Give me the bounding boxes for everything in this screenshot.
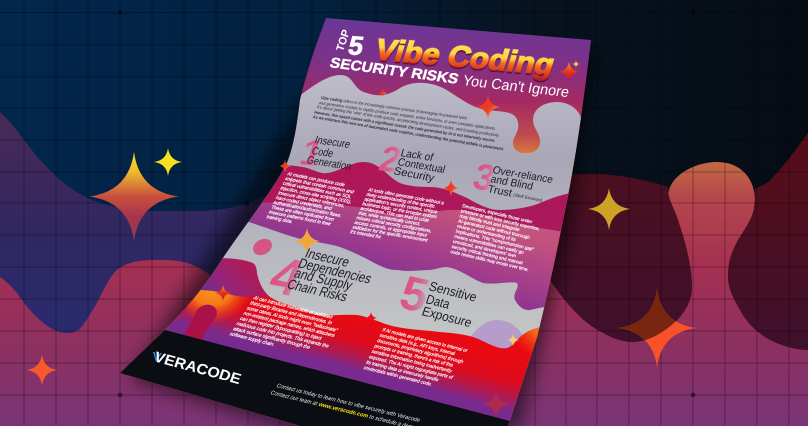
title [328, 28, 580, 101]
poster crimson blob [184, 304, 217, 340]
intro text [312, 95, 505, 151]
footer contact text [269, 383, 421, 426]
body text: lack of contextual security: deep understanding of the specific [365, 192, 437, 210]
background: right dome and glow [520, 162, 808, 426]
icon: gold sparkle right [588, 188, 630, 230]
icon: sparkle near footer left [215, 285, 231, 301]
body text: insecure dependencies: non-existent package names, which attackers [242, 311, 336, 339]
poster orange glow right [518, 327, 540, 353]
icon: orange sparkle right [618, 289, 696, 367]
intro text: It's about getting the 'vibe' of the code quickly, accelerating development cycles, and boosting productivity. [316, 104, 501, 138]
poster [120, 18, 591, 426]
body text: sensitive data exposure: credentials within generated code. [362, 365, 433, 388]
body text: insecure code generation: insecure patterns found in their [267, 209, 332, 228]
numeral 2: 2 [375, 138, 406, 180]
icon: red title sparkle [558, 62, 580, 82]
title numeral 5: 5 [346, 30, 366, 61]
body text: insecure code generation: hard-coded credentials, and [274, 195, 333, 212]
icon: header sparkle small [378, 88, 388, 98]
section 5 heading [394, 266, 479, 330]
body text: insecure dependencies: software supply chain. [228, 331, 276, 348]
body text: insecure code generation: authentication/authorization flaws. [272, 200, 343, 219]
body text: over-reliance and blind trust: Developers, especially those under [462, 203, 533, 224]
body text: over-reliance and blind trust: code review skills may erode over time. [450, 249, 529, 272]
body text: over-reliance and blind trust [450, 203, 542, 272]
poster red wave [100, 290, 545, 426]
section 4 heading: Chain Risks [285, 277, 350, 304]
intro text: As we embrace this new era of automated code creation, understanding the potential pitfalls is paramount. [312, 114, 505, 151]
section 1 heading: Code [310, 145, 335, 160]
body text: insecure dependencies: third-party libraries and dependencies. In [248, 301, 333, 326]
section 3 heading: (Skill Erosion) [513, 192, 544, 203]
background: left crimson wave [0, 260, 808, 426]
body text: sensitive data exposure: sensitive data (e.g., API keys, internal [378, 333, 456, 357]
section 3 heading: and Blind [489, 173, 534, 193]
icon: yellow title sparkle [572, 60, 580, 68]
background: right dark lobe left [550, 174, 692, 342]
section 2 heading: Security [392, 165, 436, 185]
title: Security Risks: SECURITY RISKS [328, 55, 460, 88]
section 2 heading [375, 138, 447, 185]
title: You Can't Ignore: You Can't Ignore [461, 73, 571, 101]
icon: small yellow sparkle [154, 148, 182, 176]
body text: sensitive data exposure: sensitive information being inadvertently [370, 349, 453, 375]
poster pink to purple band [220, 202, 565, 320]
body text: sensitive data exposure: prompts or training, there's a risk of this [373, 343, 455, 369]
poster black footer band [100, 330, 520, 426]
title: Vibe Coding: Vibe Coding [371, 34, 559, 81]
body text: insecure dependencies [228, 295, 347, 360]
icon: band sparkle right [443, 180, 459, 196]
body text: over-reliance and blind trust: review or understanding of its [456, 224, 517, 242]
body text: insecure dependencies: malicious code into projects. This expands the [235, 321, 330, 349]
body text: sensitive data exposure: If AI models are given access to internal or [381, 327, 469, 354]
body text: insecure code generation: These are often replicated from [270, 205, 335, 223]
poster crimson middle band [240, 162, 575, 330]
body text: lack of contextual security [349, 187, 445, 249]
body text: insecure dependencies: some cases, AI tools might even "hallucinate" [245, 306, 339, 334]
heading text: Over-reliance and Blind Trust: Over-reliance [491, 164, 554, 186]
body text: over-reliance and blind trust: unnoticed, and developers' own [452, 239, 517, 259]
body text: insecure code generation: insecure direct object references, [277, 190, 346, 209]
background: right dark lobe right [728, 133, 808, 350]
logo wordmark: VERACODE [152, 350, 243, 388]
icon: cream sparkle right [507, 334, 519, 346]
section 1 heading [295, 131, 353, 174]
body text: lack of contextual security: business logic, or the broader system [361, 201, 438, 220]
section 3 heading: Trust [486, 183, 513, 199]
poster shadow [130, 40, 596, 426]
body text: sensitive data exposure: its training data or insecurely handle [365, 360, 440, 383]
numeral 4: 4 [261, 247, 311, 308]
section 5 heading: Exposure [420, 304, 474, 330]
body text: over-reliance and blind trust: pressure or with less security expertise, [460, 208, 540, 232]
body text: sensitive data exposure [362, 327, 470, 392]
title word: TOP: TOP [334, 28, 353, 53]
body text: over-reliance and blind trust: means vulnerabilities can easily go [454, 234, 525, 255]
body text: insecure dependencies: attack surface significantly through the [231, 326, 312, 351]
body text: over-reliance and blind trust: may blindly trust and integrate [459, 213, 521, 232]
body text: over-reliance and blind trust: implications. This "comprehension gap" [455, 229, 535, 252]
section 4 heading: and Supply [292, 266, 355, 293]
icon: shaded part of orange sparkle [619, 290, 676, 340]
body text: insecure code generation: training data. [265, 214, 294, 225]
body text: insecure code generation [265, 171, 360, 234]
body text: insecure code generation: critical vulnerabilities such as SQL [281, 181, 353, 200]
intro text: However, this speed comes with a significant caveat: the code generated by AI is not inherently secure. [314, 110, 496, 143]
icon: gold sparkle mid poster [294, 228, 320, 254]
numeral 3: 3 [469, 156, 500, 199]
heading text: Sensitive Data Exposure: Sensitive [427, 279, 479, 305]
logo: Veracode [152, 350, 243, 388]
body text: lack of contextual security: that, while syntactically correct, [357, 211, 421, 227]
icon: crimson sparkle lower right [482, 390, 510, 418]
poster lower left crimson shape [186, 258, 270, 308]
body text: lack of contextual security: validation for the specific environment [351, 225, 429, 244]
poster gray panel with drips [136, 75, 581, 426]
body text: lack of contextual security: architecture. This can lead to code [359, 206, 430, 224]
icon: large gradient sparkle [90, 152, 178, 241]
body text: insecure code generation: snippets that contain common and [284, 176, 355, 195]
icon: red sparkle mid [365, 312, 377, 324]
numeral 5: 5 [394, 266, 435, 323]
contact line 1: Contact us today to learn how to vibe securely with Veracode [275, 383, 421, 424]
poster lower gray panel [212, 222, 544, 352]
section 4 heading: Dependencies [296, 256, 374, 286]
body text: sensitive data exposure: documents, proprietary algorithms) through [376, 338, 465, 365]
heading text: Lack of Contextual Security: Lack of [399, 147, 436, 164]
body text: insecure dependencies: AI can introduce vulnerable or outdated [252, 295, 334, 320]
poster header background [120, 18, 591, 426]
heading text: Insecure Dependencies and Supply Chain Risks: Insecure [303, 246, 352, 270]
numeral 1: 1 [295, 131, 329, 174]
body text: lack of contextual security: it's intended for. [349, 229, 383, 241]
body text: lack of contextual security: access controls, or appropriate input [353, 220, 428, 239]
icon: orange sparkle lower left [26, 354, 58, 386]
section 1 heading: Generation [305, 154, 353, 173]
section 5 heading: Data [424, 292, 453, 312]
heading text: Insecure Code Generation: Insecure [313, 134, 352, 151]
section 3 heading [469, 156, 554, 203]
intro text: and generative models to rapidly produce code snippets, entire functions, or even complete applications. [318, 100, 497, 131]
body text: lack of contextual security: misses critical security configurations, [355, 215, 433, 234]
section 4 heading [261, 246, 374, 308]
poster lilac dome [471, 320, 522, 348]
poster pink ellipse [253, 238, 272, 256]
body text: over-reliance and blind trust: AI-generated code without thorough [458, 218, 531, 240]
logo mark: blue slash [153, 352, 162, 362]
background: left purple wave [0, 112, 320, 426]
body text: sensitive data exposure: exposed. The AI might regurgitate parts of [368, 354, 455, 381]
icon: header sparkle large [476, 95, 500, 119]
poster orange glow left [185, 290, 248, 322]
body text: over-reliance and blind trust: security critical thinking and manual [451, 244, 523, 265]
body text: insecure code generation: injection, cross-site scripting (XSS), [279, 186, 353, 205]
intro text: Vibe coding refers to the increasingly common practice of leveraging AI-powered tools [320, 95, 468, 120]
body text: insecure dependencies: can then register (typosquatting) to inject [238, 316, 323, 342]
body text: lack of contextual security: application's security context, unique [363, 197, 439, 215]
section 2 heading: Contextual [396, 156, 447, 176]
icon: band sparkle left [279, 160, 291, 172]
body text: lack of contextual security: AI tools often generate code without a [367, 187, 445, 207]
body text: insecure code generation: AI models can produce code [286, 171, 346, 188]
